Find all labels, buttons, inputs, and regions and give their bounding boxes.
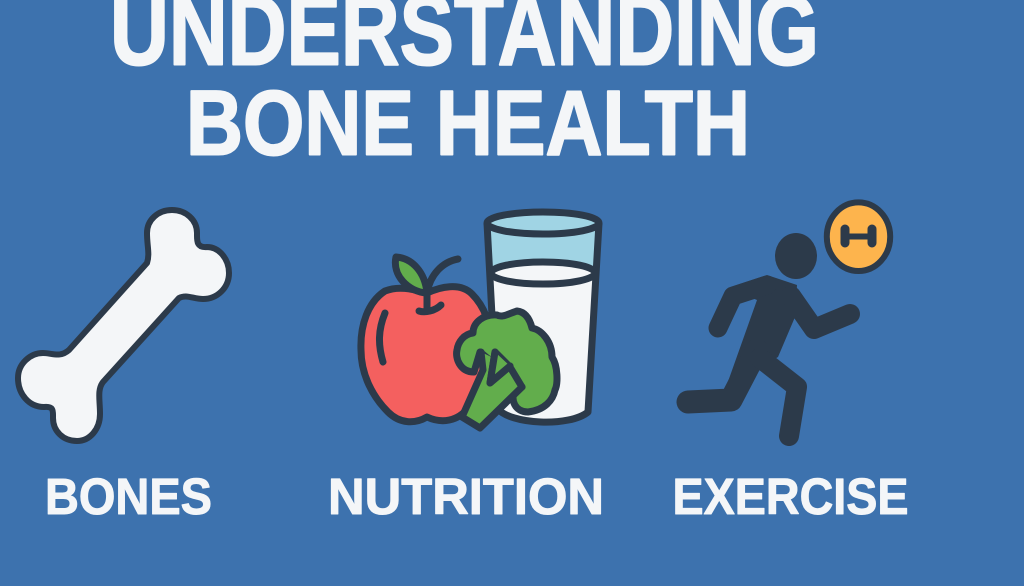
title: BONE HEALTH: [186, 72, 750, 174]
icon: broccoli: [457, 311, 557, 428]
back arm: [718, 285, 767, 328]
icon: apple: [361, 257, 490, 422]
title: [110, 0, 819, 174]
broccoli stem: [462, 352, 522, 428]
front leg: [760, 358, 797, 436]
apple leaf: [395, 257, 427, 293]
glass outline: [487, 223, 599, 422]
broccoli inner lines: [490, 352, 510, 383]
label: exercise: EXERCISE: [672, 468, 908, 525]
icon: glass of milk: [487, 212, 599, 422]
apple stem: [419, 259, 458, 312]
apple body: [361, 287, 490, 422]
icon: bone: [18, 210, 229, 441]
front arm: [791, 296, 850, 329]
back leg: [688, 350, 757, 402]
milk surface: [491, 262, 595, 284]
icon: dumbbell badge: [827, 202, 890, 271]
torso: [725, 275, 797, 390]
glass rim: [487, 212, 599, 234]
head: [775, 233, 817, 279]
label: bones: BONES: [45, 468, 212, 525]
icon: running figure: [688, 233, 850, 436]
label: nutrition: NUTRITION: [328, 468, 604, 525]
glass body: [487, 223, 599, 422]
dumbbell: [845, 229, 872, 243]
apple highlight: [379, 313, 385, 362]
broccoli crown: [457, 311, 557, 412]
water band: [487, 223, 599, 283]
